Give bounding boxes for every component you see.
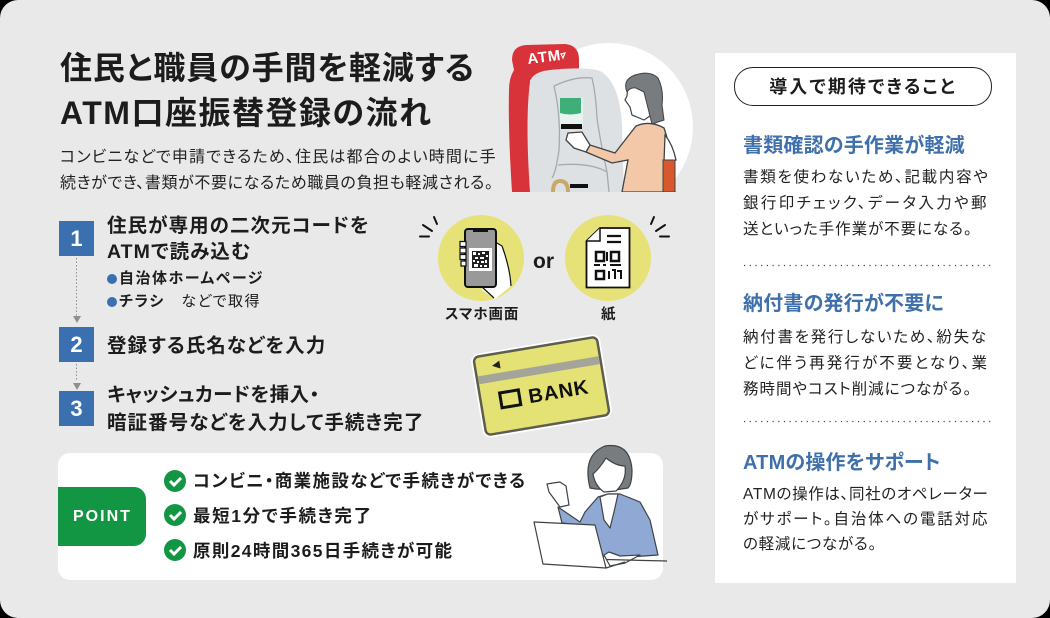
step 2 badge bbox=[59, 327, 94, 362]
benefit 2 heading: 納付書の発行が不要に bbox=[743, 293, 944, 315]
step 1 text: 住民が専用の二次元コードを bbox=[107, 215, 370, 237]
panel heading: 導入で期待できること bbox=[769, 77, 957, 97]
icon: bank card: BANK bbox=[527, 376, 591, 408]
arrow: step 2 to 3 bbox=[73, 364, 81, 390]
panel: expectations bbox=[715, 53, 1016, 583]
point item 2: 最短1分で手続き完了 bbox=[193, 506, 373, 526]
or label: or bbox=[533, 250, 554, 273]
benefit 3 text: がサポート。自治体への電話対応 bbox=[743, 511, 989, 528]
benefit 1 text: 書類を使わないため、記載内容や bbox=[743, 169, 990, 186]
step 1 text: チラシ などで取得 bbox=[119, 293, 261, 310]
icon: paper QR bbox=[565, 215, 670, 301]
title: 住民と職員の手間を軽減する bbox=[60, 50, 475, 86]
benefit 1 text: 銀行印チェック、データ入力や郵 bbox=[743, 195, 989, 212]
step 1 text: 自治体ホームページ bbox=[119, 270, 264, 287]
check icons bbox=[164, 470, 186, 561]
benefit 1 text bbox=[743, 168, 990, 238]
benefit 1 text: 送といった手作業が不要になる。 bbox=[743, 221, 973, 238]
step 3 text: キャッシュカードを挿入・ bbox=[107, 384, 320, 406]
step 3 text bbox=[107, 384, 424, 434]
icon: bank card bbox=[471, 334, 612, 438]
title: ATM口座振替登録の流れ bbox=[60, 95, 432, 131]
illustration: woman with laptop bbox=[533, 444, 667, 569]
panel heading bbox=[734, 67, 992, 106]
point badge: POINT bbox=[73, 508, 132, 525]
illustration: ATM and woman bbox=[508, 43, 693, 192]
step 3 badge bbox=[59, 391, 94, 426]
title bbox=[60, 50, 475, 131]
step 1 text: ATMで読み込む bbox=[107, 241, 252, 263]
benefit 3 text: ATMの操作は、同社のオペレーター bbox=[743, 486, 989, 503]
benefit 3 text: の軽減につながる。 bbox=[743, 536, 877, 553]
step 1 badge bbox=[59, 221, 94, 256]
illustration: ATM and woman: ATM bbox=[526, 47, 562, 68]
step 1 text bbox=[107, 215, 370, 310]
benefit 3 text bbox=[743, 486, 989, 553]
label: smartphone screen: スマホ画面 bbox=[445, 307, 519, 323]
panel: point bbox=[58, 453, 663, 580]
icon: smartphone QR bbox=[419, 215, 524, 301]
point item 1: コンビニ・商業施設などで手続きができる bbox=[193, 471, 526, 491]
benefit 1 heading: 書類確認の手作業が軽減 bbox=[743, 135, 965, 157]
step 2 badge: 2 bbox=[70, 332, 83, 357]
step 2 text: 登録する氏名などを入力 bbox=[107, 335, 326, 357]
benefit 2 text bbox=[743, 328, 989, 398]
step 1 badge: 1 bbox=[70, 226, 83, 251]
intro text: コンビニなどで申請できるため、住民は都合のよい時間に手 bbox=[60, 149, 497, 166]
point item 3: 原則24時間365日手続きが可能 bbox=[193, 541, 453, 561]
benefit 2 text: 務時間やコスト削減につながる。 bbox=[743, 381, 972, 398]
arrow: step 1 to 2 bbox=[73, 258, 81, 323]
point badge bbox=[58, 487, 146, 546]
benefit 2 text: どに伴う再発行が不要となり、業 bbox=[743, 355, 989, 372]
benefit 3 heading: ATMの操作をサポート bbox=[743, 452, 941, 474]
step 3 badge: 3 bbox=[70, 396, 83, 421]
label: paper: 紙 bbox=[601, 307, 616, 323]
step 3 text: 暗証番号などを入力して手続き完了 bbox=[107, 412, 424, 434]
intro text bbox=[60, 148, 497, 192]
benefit 2 text: 納付書を発行しないため、紛失な bbox=[743, 329, 988, 346]
intro text: 続きができ、書類が不要になるため職員の負担も軽減される。 bbox=[60, 175, 494, 192]
